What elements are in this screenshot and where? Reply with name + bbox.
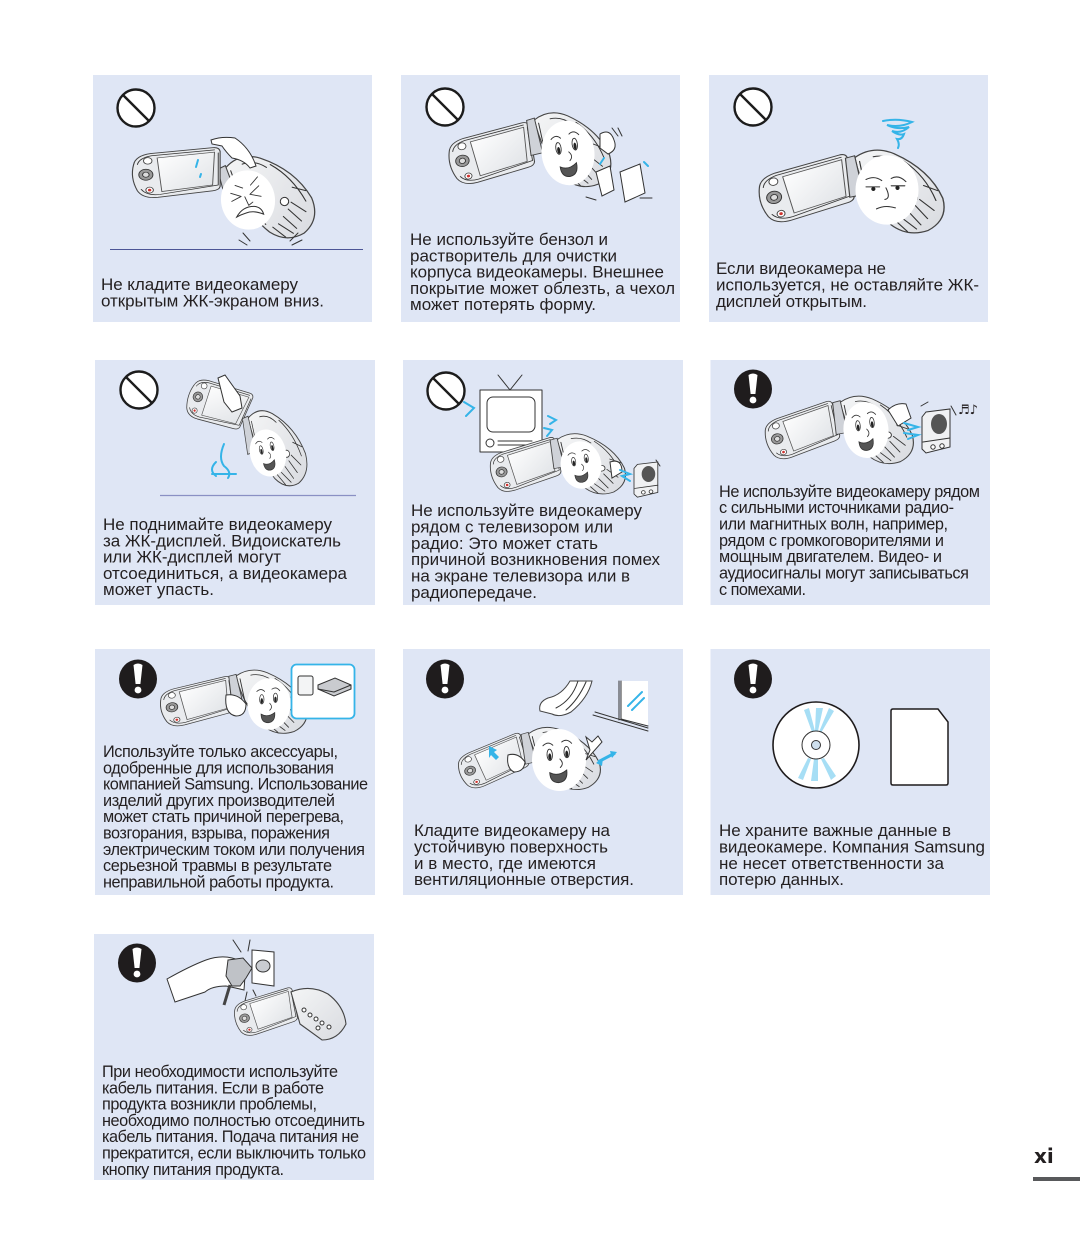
illustration: tired camera (755, 120, 945, 236)
icon: music notes: ♬♪ (958, 403, 978, 418)
caption: может стать причиной перегрева, (103, 808, 344, 826)
caption: Не храните важные данные в (719, 821, 951, 840)
icon: warning (426, 660, 464, 698)
panel: power cable (94, 934, 374, 1180)
icon: warning (118, 944, 156, 982)
caption: растворитель для очистки (410, 246, 617, 266)
caption: кабель питания. Если в работе (102, 1080, 324, 1098)
caption: радиопередаче. (411, 583, 537, 602)
caption: Не используйте видеокамеру рядом (719, 483, 980, 501)
illustration: camera held by the screen (181, 371, 309, 490)
caption (719, 821, 985, 889)
caption: радио: Это может стать (411, 534, 598, 553)
caption (414, 821, 634, 889)
illustration: camera near loudspeaker (761, 393, 978, 466)
caption: отсоединиться, а видеокамера (103, 564, 348, 583)
page number: xi (1034, 1144, 1054, 1168)
caption: продукта возникли проблемы, (102, 1096, 317, 1114)
caption: аудиосигналы могут записываться (719, 564, 969, 582)
caption: Не кладите видеокамеру (101, 275, 298, 294)
icon: prohibited (120, 372, 158, 408)
panel: strong radio sources (710, 360, 990, 605)
icon: prohibited (426, 88, 464, 126)
icon: memory card (891, 709, 948, 785)
caption: или ЖК-дисплей могут (103, 548, 281, 566)
caption: необходимо полностью отсоединить (102, 1112, 365, 1130)
illustration: hand unplugging cable (167, 940, 274, 1005)
illustration: camera with arrows (453, 723, 617, 794)
caption: кабель питания. Подача питания не (102, 1128, 359, 1146)
caption: причиной возникновения помех (411, 550, 660, 569)
caption: компанией Samsung. Использование (103, 776, 368, 794)
caption: покрытие может облезть, а чехол (410, 279, 675, 298)
illustration: camera on its screen (132, 137, 320, 250)
caption: устойчивую поверхность (414, 838, 608, 856)
caption: неправильной работы продукта. (103, 874, 334, 892)
panel: screen down warning (93, 75, 372, 322)
floor line (110, 248, 363, 250)
caption: возгорания, взрыва, поражения (103, 824, 330, 842)
caption: используется, не оставляйте ЖК- (716, 276, 979, 294)
caption: электрическим током или получения (103, 841, 365, 859)
caption: открытым ЖК-экраном вниз. (101, 292, 324, 310)
caption (719, 483, 980, 599)
illustration: camera (231, 987, 346, 1040)
caption: корпуса видеокамеры. Внешнее (410, 262, 664, 282)
caption (411, 501, 660, 602)
caption: вентиляционные отверстия. (414, 870, 634, 889)
icon: prohibited (734, 88, 772, 126)
illustration: camera and solvent bottles (445, 109, 652, 202)
panel: leave LCD open warning (709, 75, 988, 322)
panel: do not lift by LCD (95, 360, 375, 605)
caption: Не используйте бензол и (410, 230, 608, 249)
caption: серьезной травмы в результате (103, 857, 332, 875)
caption: дисплей открытым. (716, 292, 867, 311)
icon: prohibited (118, 90, 154, 126)
caption: Если видеокамера не (716, 259, 886, 278)
caption: Не поднимайте видеокамеру (103, 515, 332, 534)
caption: с сильными источниками радио- (719, 499, 954, 517)
caption (101, 275, 324, 310)
icon: warning (734, 370, 772, 408)
caption: с помехами. (719, 581, 806, 599)
caption: одобренные для использования (103, 760, 334, 778)
caption: прекратится, если выключить только (102, 1144, 366, 1162)
surface line (160, 494, 356, 496)
caption: может потерять форму. (410, 295, 596, 314)
icon: blue swirl (883, 120, 912, 148)
caption: не несет ответственности за (719, 854, 945, 873)
caption: При необходимости используйте (102, 1063, 338, 1081)
panel: solvents warning (401, 75, 680, 322)
icon: warning (734, 660, 772, 698)
caption (410, 230, 675, 314)
caption: кнопку питания продукта. (102, 1161, 284, 1179)
caption: рядом с телевизором или (411, 518, 613, 536)
caption: может упасть. (103, 580, 214, 599)
caption (103, 515, 348, 599)
caption: на экране телевизора или в (411, 566, 630, 586)
caption: мощным двигателем. Видео- и (719, 548, 942, 566)
caption (103, 743, 368, 892)
icon: warning (119, 660, 157, 698)
accessories box (292, 664, 354, 718)
caption (102, 1063, 366, 1179)
caption: Не используйте видеокамеру (411, 501, 642, 520)
panel: approved accessories (95, 649, 375, 895)
illustration: TV, camera and speaker (464, 375, 660, 497)
illustration: camera and accessories (158, 664, 354, 736)
caption: и в место, где имеются (414, 854, 596, 873)
caption: рядом с громкоговорителями и (719, 532, 944, 550)
icon: disc (773, 702, 859, 788)
panel: stable ventilated surface (403, 649, 683, 895)
page number bar (1033, 1177, 1080, 1181)
caption: изделий других производителей (103, 792, 335, 810)
panel: important data (710, 649, 990, 895)
caption: видеокамере. Компания Samsung (719, 838, 985, 856)
caption: за ЖК-дисплей. Видоискатель (103, 532, 341, 550)
caption: Кладите видеокамеру на (414, 821, 611, 840)
caption: или магнитных волн, например, (719, 516, 948, 534)
panel: TV and radio interference (403, 360, 683, 605)
illustration: window and curtain (540, 681, 648, 731)
caption: Используйте только аксессуары, (103, 743, 338, 761)
caption (716, 259, 979, 311)
caption: потерю данных. (719, 870, 844, 889)
icon: prohibited (428, 372, 464, 410)
